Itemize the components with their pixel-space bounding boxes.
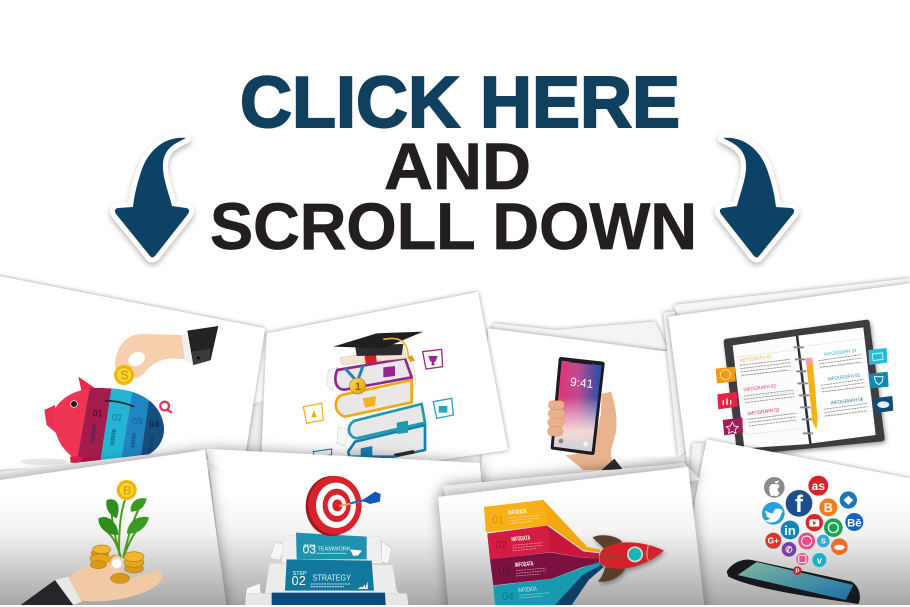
icon: social media bubbles: v <box>817 555 822 565</box>
icon: stack of books with graduation cap <box>303 332 453 457</box>
title: click here: CLICK HERE <box>240 63 680 143</box>
icon: open notebook <box>716 323 893 452</box>
arrow: left down arrow <box>115 138 189 258</box>
icon: social media bubbles: S <box>821 537 826 546</box>
icon: social media bubbles: in <box>784 523 796 538</box>
icon: social media bubbles: as <box>812 479 825 493</box>
icon: rocket with infographic ribbons: INFODATA <box>511 535 531 543</box>
icon: money plant on hand: B <box>123 483 132 497</box>
icon: rocket with infographic ribbons: INFODATA <box>515 560 534 569</box>
icon: target on stairs: 02 <box>292 574 306 588</box>
icon: stack of books with graduation cap: 1 <box>355 381 361 393</box>
title: scroll down: SCROLL DOWN <box>210 189 697 263</box>
icon: target on stairs: TEAMWORK <box>317 547 351 553</box>
icon: social media bubbles: P <box>795 569 799 575</box>
icon: piggy bank with hand and coin: 03 <box>132 416 142 426</box>
icon: rocket with infographic ribbons: INFODATA <box>518 586 538 594</box>
icon: money plant on hand <box>21 480 162 605</box>
panel: rocket slide <box>438 463 706 607</box>
icon: target on stairs: STRATEGY <box>313 573 351 583</box>
title: and: AND <box>384 129 531 203</box>
panel: books slide <box>245 292 508 487</box>
icon: piggy bank with hand and coin: 01 <box>93 409 103 419</box>
icon: piggy bank with hand and coin: 04 <box>149 420 159 430</box>
icon: smartphone lying flat <box>727 560 860 604</box>
panel: social media slide <box>688 439 910 607</box>
icon: rocket with infographic ribbons: INFODATA <box>508 508 527 517</box>
icon: social media bubbles: B <box>824 501 833 515</box>
icon: hand holding phone: 9:41 <box>569 375 594 391</box>
panel: notebook slide <box>663 278 910 483</box>
icon: open notebook: INFOGRAPH 06 <box>831 397 864 407</box>
panel: piggy bank slide <box>0 275 265 470</box>
icon: piggy bank with hand and coin: S <box>120 369 129 383</box>
panel: smartphone slide stack <box>480 322 695 490</box>
icon: rocket with infographic ribbons: 01 <box>492 515 504 527</box>
icon: piggy bank with hand and coin <box>20 326 218 467</box>
icon: social media bubbles: f <box>795 491 804 518</box>
icon: open notebook: INFOGRAPH 02 <box>743 383 777 393</box>
icon: hand holding phone <box>548 359 623 470</box>
icon: open notebook: INFOGRAPH 04 <box>824 348 857 358</box>
icon: rocket with infographic ribbons: 02 <box>495 540 507 552</box>
panel: target slide <box>207 449 490 607</box>
icon: social media bubbles: ❖ <box>843 494 854 508</box>
icon: social media bubbles: Bē <box>847 517 862 529</box>
icon: target on stairs: STEP <box>293 571 307 577</box>
icon: social media bubbles: G+ <box>768 536 779 546</box>
arrow: right down arrow <box>720 138 794 258</box>
icon: open notebook: INFOGRAPH 05 <box>827 373 861 383</box>
icon: open notebook: INFOGRAPH 01 <box>740 354 772 364</box>
icon: target on stairs <box>245 476 408 605</box>
panel: plant slide <box>0 449 228 607</box>
icon: target on stairs: 03 <box>303 542 316 556</box>
icon: target on stairs: STEP <box>303 543 316 548</box>
icon: rocket with infographic ribbons: 03 <box>499 566 510 578</box>
icon: rocket with infographic ribbons: 04 <box>502 591 514 603</box>
icon: rocket with infographic ribbons <box>484 500 664 605</box>
icon: social media bubbles <box>762 476 863 575</box>
icon: open notebook: INFOGRAPH 03 <box>747 407 780 417</box>
icon: piggy bank with hand and coin: 02 <box>112 412 122 422</box>
icon: social media bubbles: ✆ <box>785 545 793 555</box>
